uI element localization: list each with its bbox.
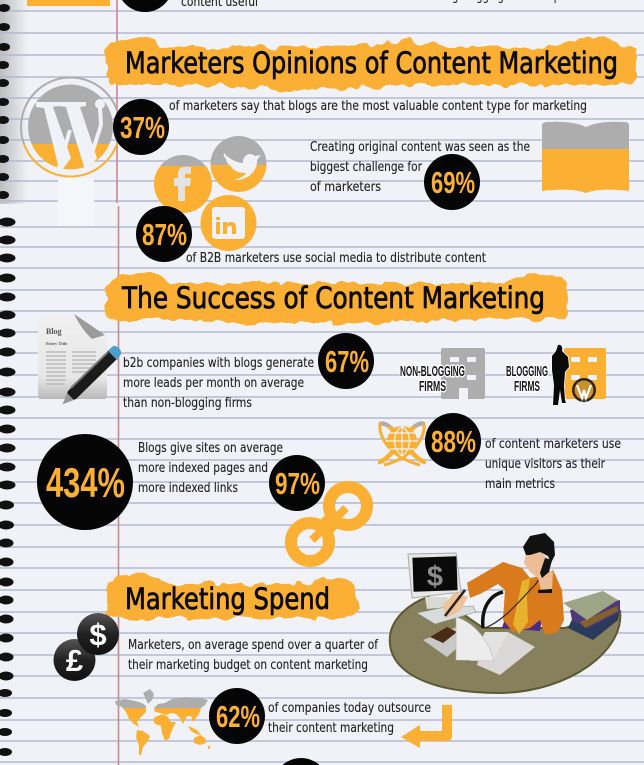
previous section remnant — [27, 0, 565, 12]
illustration: businessman at desk — [390, 533, 620, 693]
text: social media: of B2B marketers use social media to distribute content — [186, 251, 486, 266]
text: unique visitors: unique visitors as their — [485, 457, 606, 472]
text: indexed pages: more indexed pages and — [138, 461, 268, 476]
stat 67% — [318, 333, 374, 389]
icon: blogging building — [506, 345, 606, 405]
stat 37%: 37% — [120, 110, 165, 145]
icon: blog page and pencil: Entry Title — [46, 341, 67, 346]
stat 88% — [425, 413, 481, 469]
heading text: The Success of Content Marketing — [121, 281, 545, 315]
text: indexed pages — [138, 441, 283, 496]
stack of books — [563, 591, 620, 640]
heading text: Marketing Spend — [125, 582, 330, 616]
notebook spiral binding — [0, 4, 16, 756]
stat 62% — [209, 688, 265, 744]
label: non-blogging firms: NON-BLOGGING — [400, 363, 465, 380]
icon: open book — [542, 122, 629, 193]
raised hand — [538, 568, 553, 590]
icon: twitter — [210, 136, 266, 192]
man trousers — [502, 612, 542, 631]
text: unique visitors — [485, 437, 621, 492]
text: indexed pages: Blogs give sites on average — [138, 441, 283, 456]
heading highlight — [105, 37, 637, 89]
text: b2b leads: more leads per month on average — [123, 376, 304, 391]
text: marketing budget: Marketers, on average spend over a quarter of — [128, 638, 378, 653]
arrow: curved return arrow — [401, 705, 452, 748]
text: indexed pages: more indexed links — [138, 481, 238, 496]
section: Marketing Spend — [54, 533, 620, 765]
text: original content challenge: of marketers — [310, 180, 381, 195]
icon: businessman silhouette — [552, 345, 569, 405]
stat 69%: 69% — [431, 165, 475, 200]
text: outsourcing: of companies today outsource — [268, 701, 431, 716]
phone — [540, 558, 552, 578]
icon: dollar coin: $ — [89, 617, 107, 652]
text: marketing budget: their marketing budget on content marketing — [128, 658, 368, 673]
stat 88%: 88% — [431, 424, 476, 459]
icon: globe with orbits — [378, 423, 426, 465]
chair — [483, 592, 503, 628]
monitor — [408, 553, 461, 609]
stat 97%: 97% — [275, 466, 320, 501]
label: non-blogging firms — [400, 363, 465, 395]
label: blogging firms: BLOGGING — [506, 363, 548, 380]
text: b2b leads: b2b companies with blogs generate — [123, 356, 314, 371]
icon: linkedin — [200, 195, 256, 251]
phone cord — [485, 578, 540, 628]
pen — [445, 590, 465, 616]
icon: non-blogging building — [400, 348, 485, 399]
icon: world map — [115, 689, 211, 755]
stat 62%: 62% — [216, 699, 260, 734]
icon: pound coin: £ — [66, 643, 83, 678]
orange block cut off at top — [27, 0, 110, 6]
cut off stat circle at bottom — [282, 758, 320, 765]
heading highlight — [107, 573, 357, 618]
text: outsourcing — [268, 701, 431, 736]
icon: pound coin — [54, 639, 96, 681]
stat 37% — [113, 99, 169, 155]
tie — [513, 578, 530, 634]
monitor: $ — [427, 561, 443, 593]
text: outsourcing: their content marketing — [268, 721, 394, 736]
watch — [538, 589, 552, 593]
cut off stat circle — [122, 0, 168, 12]
text: marketing budget — [128, 638, 378, 673]
icon: blog page and pencil — [38, 314, 121, 404]
notebook on desk — [423, 627, 457, 657]
text: b2b leads — [123, 356, 314, 411]
icon: wordpress logo — [21, 78, 120, 176]
stat 67%: 67% — [325, 344, 369, 379]
section: The Success of Content Marketing — [37, 273, 621, 561]
label: blogging firms — [506, 363, 548, 395]
icon: small wordpress badge — [572, 378, 596, 402]
label: non-blogging firms: FIRMS — [419, 378, 446, 395]
icon: dollar coin — [77, 613, 119, 655]
stat 87%: 87% — [142, 217, 187, 252]
section: Marketers Opinions of Content Marketing — [21, 37, 637, 266]
icon: chain links — [291, 487, 367, 561]
label: blogging firms: FIRMS — [514, 378, 540, 395]
keyboard — [417, 606, 476, 624]
stat 69% — [424, 154, 480, 210]
text: original content challenge: Creating original content was seen as the — [310, 140, 530, 155]
man head — [524, 552, 548, 578]
text: original content challenge — [310, 140, 530, 195]
icon: blog page and pencil: Blog — [46, 327, 62, 336]
stat 87% — [136, 206, 192, 262]
text: original content challenge: biggest challenge for — [310, 160, 423, 175]
stat 434%: 434% — [46, 459, 125, 506]
text: b2b leads: than non-blogging firms — [123, 396, 252, 411]
heading highlight — [106, 273, 569, 324]
text: unique visitors: main metrics — [485, 477, 555, 492]
papers — [477, 632, 535, 675]
man torso and arm — [467, 562, 564, 635]
stat 97% — [269, 455, 325, 511]
icon: facebook — [154, 155, 212, 213]
stat 434% — [37, 434, 133, 530]
hand — [443, 592, 468, 618]
desk — [390, 597, 620, 693]
